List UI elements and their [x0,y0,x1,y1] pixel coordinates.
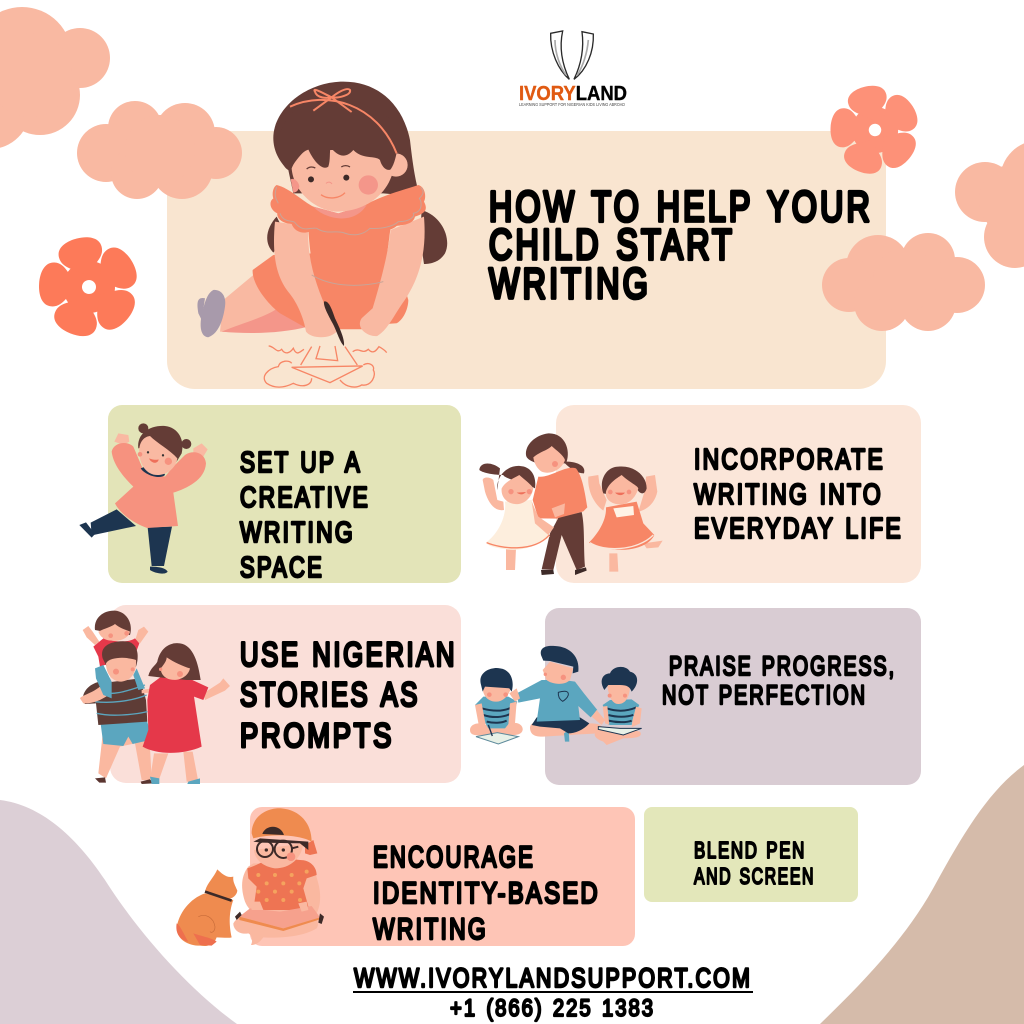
panel text: PRAISE PROGRESS, [669,651,896,681]
panel: Nigerian stories [80,605,461,784]
decoration: cloud right [822,233,985,331]
logo: Ivoryland [519,31,627,107]
panel text [373,841,600,946]
logo wordmark: IVORYLAND [519,83,627,105]
panel: praise progress [470,608,921,785]
title text [489,183,873,308]
illustration: child reading with cat [176,808,324,946]
panel text: NOT PERFECTION [662,680,867,710]
panel text [662,651,896,710]
panel text: EVERYDAY LIFE [694,513,903,545]
panel text: BLEND PEN [694,837,806,863]
background shape: tan hill bottom right [820,765,1024,1024]
panel text: INCORPORATE [694,444,885,476]
panel: creative writing space [79,405,461,584]
title text: WRITING [489,260,651,308]
panel background [545,608,921,785]
logo tagline: LEARNING SUPPORT FOR NIGERIAN KIDS LIVING ABROAD [519,102,626,107]
decoration: cloud centre left [77,101,242,199]
panel text: STORIES AS [240,676,420,714]
icon: ivory tusks [551,31,593,79]
decoration: cloud top left [0,7,110,149]
title text: CHILD START [489,221,735,269]
illustration: mother and two daughters [479,433,663,575]
panel text: SPACE [240,552,324,584]
illustration: three boys reading [470,646,642,745]
panel: hero title [167,82,886,389]
panel text [694,444,903,545]
panel text [240,636,457,755]
decoration: cloud right edge [955,140,1024,268]
panel text: SET UP A [240,447,362,479]
decoration: flower top right [817,75,933,188]
panel text: IDENTITY-BASED [373,877,600,910]
illustration: girl drawing on the floor [197,82,447,387]
panel: identity-based writing [176,807,635,946]
panel text: WRITING INTO [694,479,883,511]
panel background [644,807,858,902]
panel background [250,807,635,946]
panel text [694,837,815,889]
decoration: flower left [24,225,155,352]
panel text: PROMPTS [240,717,394,755]
panel: writing in everyday life [479,405,921,583]
hero panel background [167,131,886,389]
panel: blend pen and screen [644,807,858,902]
panel text: WRITING [240,517,355,549]
panel text: WRITING [373,913,488,946]
illustration: family of three [80,611,230,784]
panel text: ENCOURAGE [373,841,535,874]
footer: website and phone [353,963,753,1022]
panel background [108,405,461,583]
panel background [110,605,461,783]
panel text: CREATIVE [240,482,370,514]
background shape: mauve hill bottom left [0,800,237,1024]
illustration: girl dancing [79,423,208,574]
panel text: AND SCREEN [694,863,815,889]
website link: WWW.IVORYLANDSUPPORT.COM [354,963,752,993]
panel background [556,405,921,583]
panel text: USE NIGERIAN [240,636,457,674]
panel text [240,447,370,584]
phone number: +1 (866) 225 1383 [450,995,655,1022]
title text: HOW TO HELP YOUR [489,183,873,231]
